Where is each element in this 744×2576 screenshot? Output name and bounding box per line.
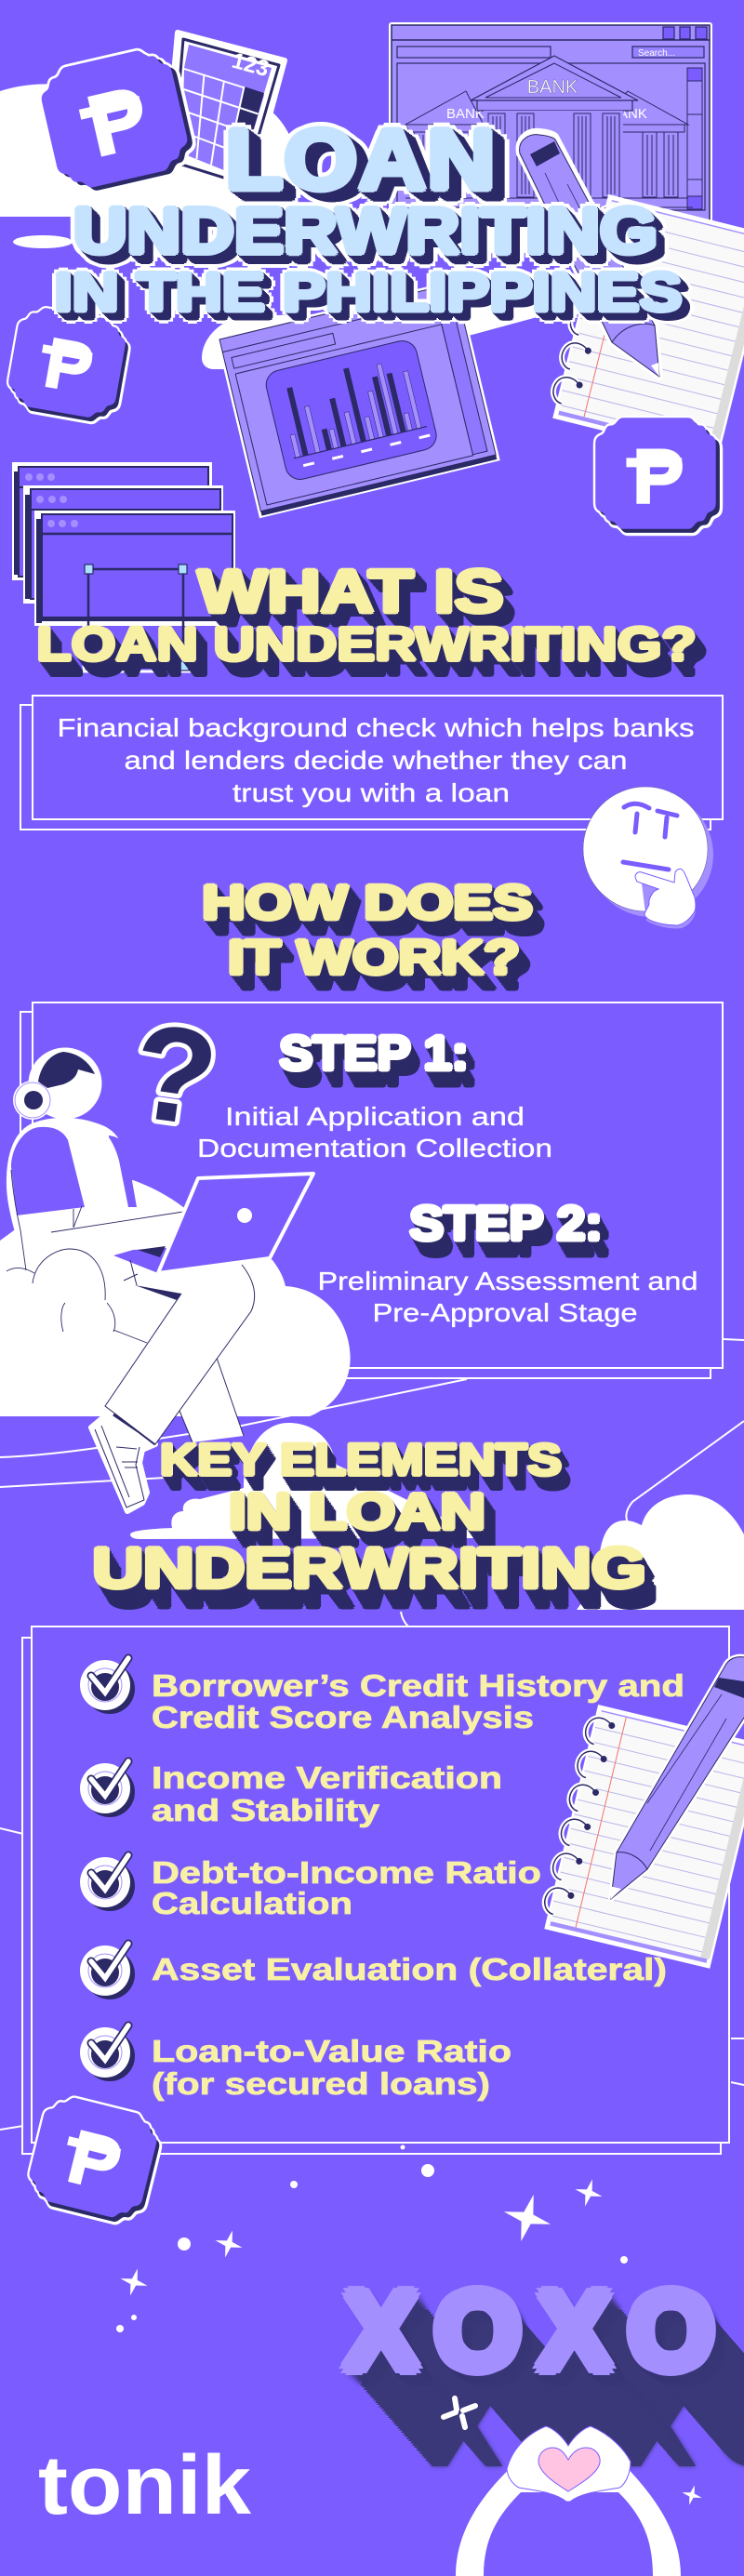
item 2: income: and Stability bbox=[152, 1793, 380, 1827]
heading line 2: LOAN UNDERWRITING? bbox=[36, 617, 697, 671]
bank browser window: BANK bbox=[609, 106, 647, 122]
notebook top right bbox=[547, 195, 744, 457]
item 1: credit history bbox=[80, 1658, 684, 1734]
heading line 1: KEY ELEMENTS bbox=[160, 1436, 562, 1485]
title line: in the philippines: IN THE PHILIPPINES bbox=[55, 262, 682, 323]
stacked browser windows bbox=[12, 462, 235, 671]
stars and dots bbox=[116, 2144, 628, 2332]
pencil top bbox=[520, 132, 659, 377]
tonik logo: tonik bbox=[38, 2439, 252, 2532]
step 2 heading: STEP 2: bbox=[409, 1197, 603, 1251]
peso coin 3: P bbox=[632, 433, 684, 520]
xoxo lettering: XOXO bbox=[344, 2269, 731, 2393]
panel: steps: Pre-Approval Stage bbox=[372, 1298, 638, 1327]
peso coin 1 bbox=[35, 43, 199, 199]
item 2: income bbox=[80, 1760, 502, 1827]
title line: loan: LOAN bbox=[225, 113, 497, 207]
calculator: 123 bbox=[229, 48, 272, 82]
bank browser window bbox=[389, 22, 712, 223]
sparkles bbox=[444, 2398, 704, 2507]
bank browser window: BANK bbox=[446, 106, 485, 122]
peso coin 3 bbox=[595, 418, 721, 534]
title line: underwriting: UNDERWRITING bbox=[73, 194, 658, 267]
heading: key elements bbox=[92, 1436, 657, 1610]
heading: how does it work bbox=[202, 876, 545, 991]
heading line 2: IN LOAN bbox=[229, 1482, 485, 1540]
heading: what is loan underwriting bbox=[36, 557, 707, 677]
panel: key elements bbox=[22, 1627, 729, 2154]
top clouds bbox=[0, 84, 575, 369]
bank browser window: Search... bbox=[638, 48, 675, 59]
heading line 3: UNDERWRITING bbox=[92, 1536, 646, 1600]
peso coin 4: P bbox=[60, 2115, 129, 2207]
illustration: person with laptop on cloud bbox=[0, 1049, 351, 1511]
item 5: loan to value: (for secured loans) bbox=[152, 2066, 490, 2101]
panel: steps: Preliminary Assessment and bbox=[318, 1267, 698, 1295]
notebook right with pencil bbox=[538, 1657, 744, 1966]
checklist bbox=[80, 1658, 684, 2101]
panel: steps bbox=[20, 1003, 723, 1378]
panel: steps: Initial Application and bbox=[225, 1102, 525, 1131]
heading line 1: WHAT IS bbox=[198, 557, 503, 625]
background connector lines bbox=[0, 1339, 744, 2130]
item 1: credit history: Borrower’s Credit History and bbox=[152, 1668, 684, 1703]
chart browser window bbox=[216, 280, 500, 518]
panel: definition bbox=[20, 696, 723, 830]
item 5: loan to value: Loan-to-Value Ratio bbox=[152, 2034, 512, 2068]
item 5: loan to value bbox=[80, 2025, 512, 2101]
icon: question mark: ? bbox=[124, 994, 226, 1155]
title bbox=[52, 113, 692, 324]
icon: thinking face bbox=[583, 787, 713, 928]
peso coin 4 bbox=[22, 2091, 166, 2229]
peso coin 2: P bbox=[39, 323, 99, 408]
bank browser window: BANK bbox=[527, 77, 578, 98]
panel: definition: Financial background check which helps banks bbox=[58, 713, 694, 742]
item 4: asset evaluation bbox=[80, 1944, 667, 1999]
heading line 2: IT WORK? bbox=[228, 931, 520, 985]
item 3: debt to income: Debt-to-Income Ratio bbox=[152, 1855, 541, 1890]
item 2: income: Income Verification bbox=[152, 1760, 502, 1795]
item 3: debt to income: Calculation bbox=[152, 1886, 352, 1920]
item 3: debt to income bbox=[80, 1855, 541, 1920]
step 1 heading: STEP 1: bbox=[279, 1027, 469, 1081]
peso coin 2 bbox=[4, 304, 133, 427]
heading line 1: HOW DOES bbox=[202, 876, 533, 930]
hands and heart bbox=[456, 2426, 681, 2576]
middle clouds bbox=[130, 1423, 744, 1610]
panel: steps: Documentation Collection bbox=[197, 1134, 552, 1162]
item 1: credit history: Credit Score Analysis bbox=[152, 1700, 534, 1734]
calculator bbox=[166, 33, 285, 191]
peso coin 1: P bbox=[80, 70, 156, 175]
panel: definition: trust you with a loan bbox=[232, 778, 510, 807]
item 4: asset evaluation: Asset Evaluation (Collateral) bbox=[152, 1952, 667, 1986]
panel: definition: and lenders decide whether they can bbox=[125, 746, 627, 775]
